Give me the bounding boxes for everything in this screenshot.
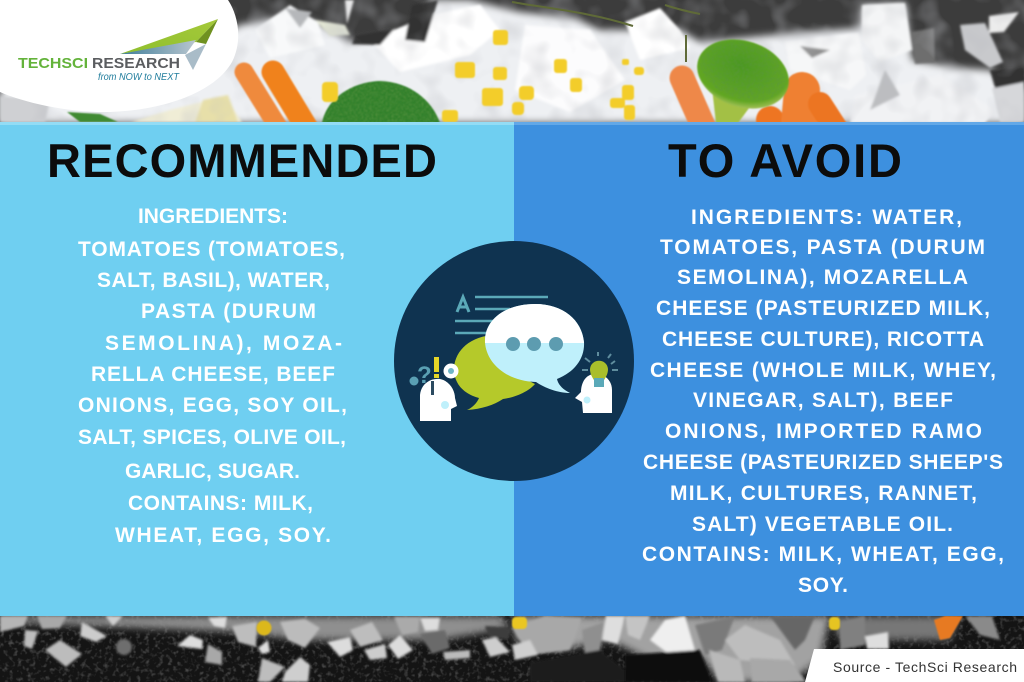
text block: recommended ingredients: TOMATOES (TOMATOES,	[78, 238, 345, 261]
text block: recommended ingredients: SALT, BASIL), WATER,	[97, 269, 330, 292]
green bean	[67, 112, 118, 122]
icon: white speech bubble	[485, 304, 584, 393]
text block: to avoid ingredients: TOMATOES, PASTA (DURUM	[660, 236, 985, 259]
text block: recommended ingredients: SALT, SPICES, OLIVE OIL,	[78, 426, 346, 449]
icon: left head with question: ?	[417, 362, 432, 389]
text block: recommended ingredients: ONIONS, EGG, SOY OIL,	[78, 394, 347, 417]
text block: to avoid ingredients: CHEESE CULTURE), RICOTTA	[662, 328, 984, 351]
logo tagline: from NOW to NEXT	[98, 71, 180, 83]
text block: to avoid ingredients: MILK, CULTURES, RANNET,	[670, 482, 977, 505]
mottled onion shading	[0, 0, 1024, 123]
text block: recommended ingredients: RELLA CHEESE, BEEF	[91, 363, 335, 386]
icon: right head with lightbulb	[575, 352, 618, 413]
corn kernels	[322, 30, 644, 122]
broccoli	[322, 28, 798, 123]
text block: recommended ingredients: CONTAINS: MILK,	[128, 492, 313, 515]
heading: to avoid: TO AVOID	[668, 134, 902, 187]
text block: to avoid ingredients: INGREDIENTS: WATER,	[691, 206, 962, 229]
onion highlights and shadows	[0, 0, 1024, 123]
text block: to avoid ingredients: CONTAINS: MILK, WHEAT, EGG,	[642, 543, 1004, 566]
carrots	[244, 72, 840, 135]
text block: to avoid ingredients: CHEESE (PASTEURIZED SHEEP'S	[643, 451, 1003, 474]
text block: to avoid ingredients: VINEGAR, SALT), BEEF	[693, 389, 953, 412]
logo name part two: RESEARCH	[92, 55, 180, 72]
source tag	[805, 649, 1024, 682]
icon: conversation circle	[394, 241, 634, 481]
icon: green speech bubble	[454, 335, 535, 410]
text block: recommended ingredients: PASTA (DURUM	[141, 300, 316, 323]
icon: three dots	[506, 337, 563, 351]
logo badge	[0, 0, 238, 112]
heading: recommended: RECOMMENDED	[47, 134, 437, 187]
white onion mass	[0, 0, 1024, 123]
logo wordmark: TECHSCI	[18, 55, 88, 72]
text block: to avoid ingredients: ONIONS, IMPORTED RAMO	[665, 420, 982, 443]
text block: to avoid ingredients: SOY.	[798, 574, 848, 597]
text block: recommended ingredients: SEMOLINA), MOZA-	[105, 332, 342, 355]
text block: to avoid ingredients	[642, 206, 1004, 597]
text block: recommended ingredients: GARLIC, SUGAR.	[125, 460, 300, 483]
source text: Source - TechSci Research	[833, 659, 1017, 675]
text block: recommended ingredients: WHEAT, EGG, SOY.	[115, 524, 331, 547]
corn and carrot pieces	[256, 616, 963, 640]
text block: to avoid ingredients: CHEESE (PASTEURIZED MILK,	[656, 297, 990, 320]
text block: to avoid ingredients: SALT) VEGETABLE OIL.	[692, 513, 953, 536]
text block: recommended ingredients	[78, 205, 347, 547]
logo swoosh icon	[120, 19, 218, 70]
panel: to avoid	[514, 122, 1024, 616]
text block: recommended ingredients: INGREDIENTS:	[138, 205, 288, 228]
icon: left head with question	[410, 357, 458, 421]
panel: recommended	[0, 122, 514, 616]
photo: top vegetable band	[0, 0, 1024, 135]
text block: to avoid ingredients: CHEESE (WHOLE MILK, WHEY,	[650, 359, 996, 382]
icon: document lines	[455, 297, 548, 333]
text block: to avoid ingredients: SEMOLINA), MOZARELLA	[677, 266, 968, 289]
thyme sprig	[512, 2, 700, 62]
photo: bottom vegetable band	[0, 616, 1024, 682]
